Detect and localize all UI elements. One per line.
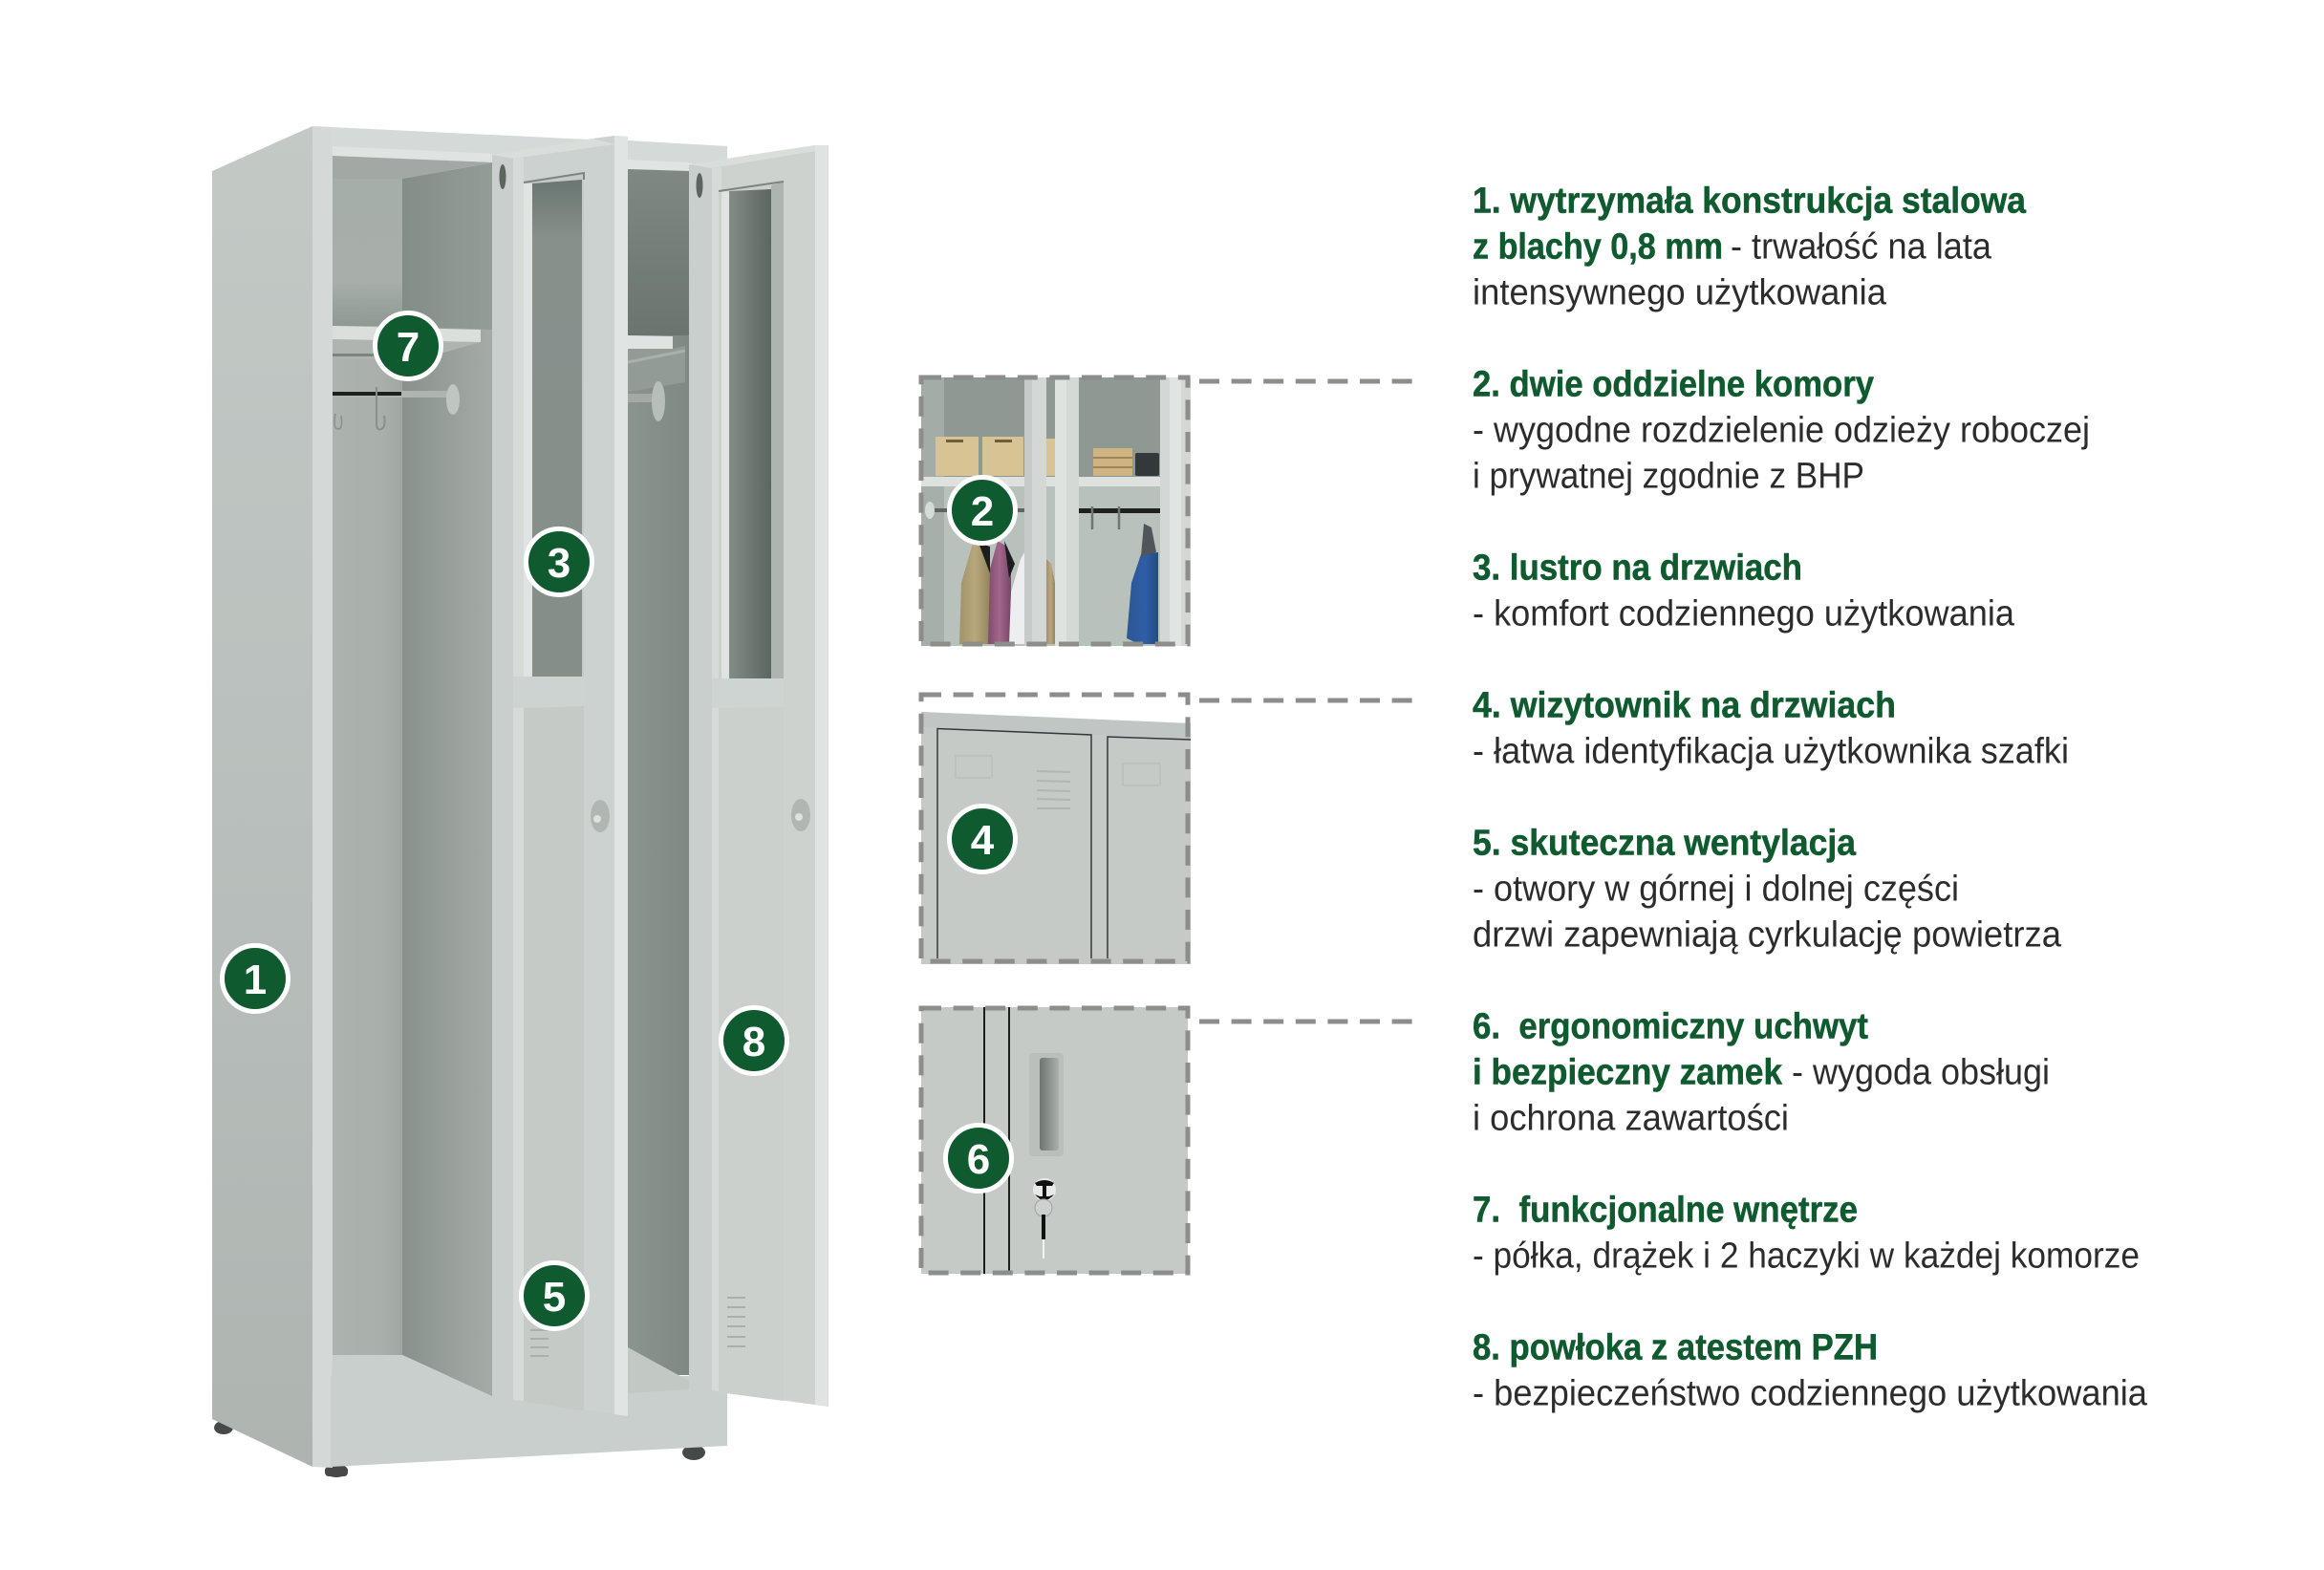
ventilation slots — [1037, 771, 1070, 808]
feature 5 text: - otwory w górnej i dolnej części — [1473, 870, 1959, 910]
left compartment back wall — [333, 179, 402, 1355]
wooden crate — [1093, 448, 1132, 476]
feet — [214, 1421, 705, 1477]
door bar — [513, 677, 584, 708]
panel: name plate detail — [921, 695, 1191, 964]
left compartment ceiling — [333, 156, 494, 179]
feature 8 text: - bezpieczeństwo codziennego użytkowania — [1473, 1374, 2148, 1414]
feature 3 text: - komfort codziennego użytkowania — [1473, 594, 2015, 634]
feature 8 text: 8. powłoka z atestem PZH — [1473, 1328, 1878, 1368]
locker cabinet — [212, 126, 828, 1477]
feature 2 text: 2. dwie oddzielne komory — [1473, 365, 1874, 405]
dashed frame 2 — [921, 377, 1188, 644]
shelf, right compartment — [628, 335, 685, 421]
right compartment — [628, 169, 689, 1375]
feature 8 text — [1473, 1328, 2148, 1414]
door 2 — [689, 145, 828, 1407]
feature 6 text: i ochrona zawartości — [1473, 1099, 1789, 1139]
badge 8: 8 — [742, 1019, 765, 1065]
vent — [530, 1330, 549, 1356]
feature 6 text: - wygoda obsługi — [1792, 1053, 2050, 1093]
dashed frame 6 — [921, 1008, 1188, 1273]
feature 3 text — [1473, 548, 2015, 634]
badge 7: 7 — [397, 324, 420, 371]
feature 6 text: 6. ergonomiczny uchwyt — [1473, 1007, 1868, 1047]
card holders — [956, 756, 1160, 785]
badge 4: 4 — [971, 817, 995, 864]
feature 2 text: i prywatnej zgodnie z BHP — [1473, 457, 1864, 497]
badge 8 — [721, 1007, 787, 1074]
left compartment side wall — [402, 162, 494, 1397]
mirror 3 — [532, 180, 582, 677]
leader line 6 — [1199, 1019, 1413, 1024]
feature 7 text: 7. funkcjonalne wnętrze — [1473, 1191, 1858, 1231]
feature 7 text — [1473, 1191, 2140, 1277]
black box — [1135, 453, 1159, 476]
badge 4 — [950, 807, 1015, 871]
base plinth and floor backing — [331, 1376, 727, 1467]
left compartment floor — [331, 1355, 494, 1407]
feature 5 text: drzwi zapewniają cyrkulację powietrza — [1473, 915, 2062, 956]
shelf, left compartment — [333, 326, 481, 429]
storage boxes — [936, 437, 1055, 476]
rods — [935, 508, 1024, 512]
feature 1 text: - trwałość na lata — [1731, 227, 1992, 268]
feature 5 text: 5. skuteczna wentylacja — [1473, 824, 1857, 864]
top band — [331, 127, 727, 164]
badge 2: 2 — [971, 488, 994, 535]
lock and key — [1033, 1178, 1056, 1258]
feature 2 text — [1473, 365, 2090, 497]
feature 3 text: 3. lustro na drzwiach — [1473, 548, 1802, 589]
badge 3: 3 — [548, 540, 570, 587]
hinge hole — [696, 173, 703, 198]
feature 1 text: 1. wytrzymała konstrukcja stalowa — [1473, 182, 2027, 222]
door bar — [712, 678, 784, 708]
badge 3 — [526, 529, 592, 594]
badge 5: 5 — [543, 1274, 566, 1321]
door knob — [591, 800, 610, 832]
mirror 8 — [729, 189, 771, 678]
recessed handle — [1029, 1053, 1064, 1156]
door outlines — [937, 728, 1091, 958]
hanging rod — [333, 391, 449, 398]
badge 5 — [522, 1263, 587, 1328]
feature 1 text: z blachy 0,8 mm — [1473, 227, 1723, 268]
front left strip — [312, 126, 333, 1468]
leader line 4 — [1199, 698, 1413, 703]
shelf — [921, 477, 1160, 486]
feature 5 text — [1473, 824, 2062, 956]
panel: two compartments detail — [921, 377, 1191, 646]
feature 1 text — [1473, 182, 2027, 313]
vent — [727, 1298, 745, 1346]
badge 6: 6 — [967, 1136, 990, 1183]
badge 6 — [946, 1126, 1011, 1191]
feature 4 text: - łatwa identyfikacja użytkownika szafki — [1473, 732, 2069, 772]
feature 6 text — [1473, 1007, 2050, 1139]
badge 2 — [950, 478, 1015, 543]
leader line 2 — [1199, 378, 1413, 384]
side panel — [212, 126, 312, 1467]
door edges — [1032, 377, 1046, 642]
door seams — [983, 1007, 985, 1274]
badge 1 — [222, 946, 289, 1011]
feature 4 text: 4. wizytownik na drzwiach — [1473, 686, 1896, 726]
panel: handle and lock detail — [921, 1007, 1188, 1274]
feature 7 text: - półka, drążek i 2 haczyki w każdej komorze — [1473, 1237, 2140, 1277]
door 1 — [492, 136, 628, 1416]
feature 1 text: intensywnego użytkowania — [1473, 273, 1887, 313]
door knob — [791, 799, 810, 831]
feature 6 text: i bezpieczny zamek — [1473, 1053, 1783, 1093]
dashed frame 4 — [921, 695, 1188, 961]
coat hooks — [334, 414, 342, 429]
hanging clothes — [959, 524, 1158, 644]
badge 1: 1 — [244, 957, 267, 1003]
badge 7 — [375, 313, 441, 378]
feature 2 text: - wygodne rozdzielenie odzieży roboczej — [1473, 411, 2090, 451]
hinge hole — [499, 164, 506, 189]
feature 4 text — [1473, 686, 2069, 772]
